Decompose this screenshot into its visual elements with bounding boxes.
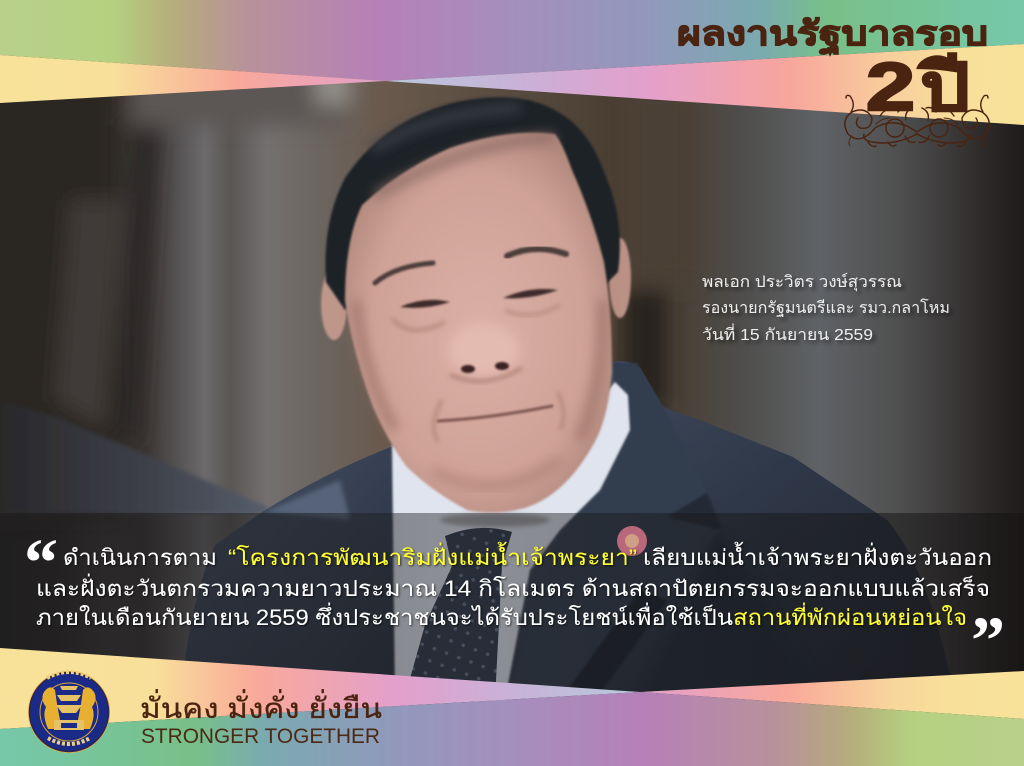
caption: speaker name, position and date: พลเอก ประวิตร วงษ์สุวรรณ bbox=[702, 272, 902, 292]
ornament flourish bbox=[845, 95, 989, 146]
blurred bystander shoulder bbox=[0, 400, 270, 514]
line 1: เลียบแม่น้ำเจ้าพระยาฝั่งตะวันออก bbox=[643, 542, 992, 570]
facial features bbox=[356, 138, 603, 485]
lions bbox=[42, 687, 96, 729]
translucent quote band bbox=[0, 513, 1024, 698]
top gradient banner bbox=[0, 0, 1024, 125]
hair highlight bbox=[372, 108, 520, 150]
opening quote mark: “ bbox=[24, 524, 58, 600]
shirt collar bbox=[392, 382, 630, 700]
caption: speaker name, position and date bbox=[702, 272, 950, 344]
face bbox=[345, 133, 612, 513]
title: ผลงานรัฐบาลรอบ bbox=[677, 15, 988, 56]
line 2: และฝั่งตะวันตกรวมความยาวประมาณ 14 กิโลเมตร ด้านสถาปัตยกรรมจะออกแบบแล้วเสร็จ bbox=[36, 573, 990, 601]
line 1: “โครงการพัฒนาริมฝั่งแม่น้ำเจ้าพระยา” bbox=[228, 542, 637, 570]
necktie bbox=[404, 528, 512, 700]
jacket bbox=[180, 361, 955, 700]
person portrait bbox=[180, 97, 955, 700]
title: 2 years bbox=[866, 49, 970, 125]
neck shadow bbox=[440, 513, 550, 527]
lapel pin bbox=[617, 526, 647, 556]
footer slogan Thai: มั่นคง มั่งคั่ง ยั่งยืน bbox=[140, 689, 382, 724]
footer slogan English: STRONGER TOGETHER bbox=[141, 725, 380, 748]
caption: speaker name, position and date: รองนายกรัฐมนตรีและ รมว.กลาโหม bbox=[702, 298, 950, 317]
caption: speaker name, position and date: วันที่ 15 กันยายน 2559 bbox=[702, 323, 873, 344]
line 1: ดำเนินการตาม bbox=[63, 545, 217, 570]
seal border inscription bbox=[47, 672, 91, 744]
hair bbox=[325, 97, 620, 310]
line 3: ภายในเดือนกันยายน 2559 ซึ่งประชาชนจะได้รับประโยชน์เพื่อใช้เป็น bbox=[36, 602, 733, 630]
line 3: สถานที่พักผ่อนหย่อนใจ bbox=[733, 602, 967, 630]
ears bbox=[321, 238, 631, 340]
line 3 bbox=[36, 602, 967, 630]
title: 2 years: 2 bbox=[866, 49, 915, 125]
line 1 bbox=[63, 542, 992, 570]
quote text bbox=[36, 542, 992, 630]
central vase and table bbox=[54, 686, 84, 730]
closing quote mark: ” bbox=[971, 602, 1005, 678]
bottom gradient banner bbox=[0, 648, 1024, 766]
title: 2 years: ปี bbox=[917, 50, 970, 124]
government seal bbox=[28, 671, 110, 753]
